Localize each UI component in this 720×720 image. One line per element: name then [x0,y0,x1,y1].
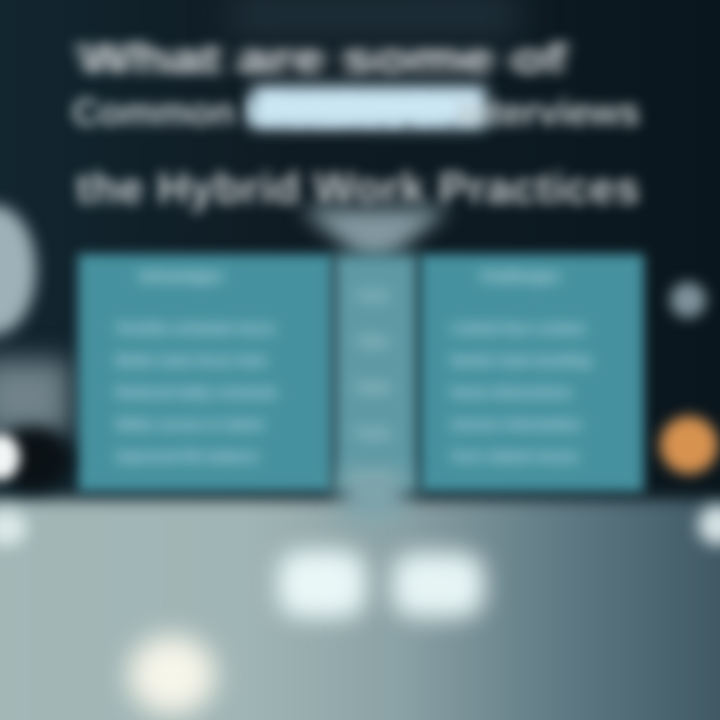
center column labels: Space [352,471,393,487]
background: dark upper wall [0,0,720,510]
light spot left edge [0,510,27,546]
floor light blob 1 [278,550,366,618]
left column text: Wider access to talent [116,416,264,432]
subtitle line: the Hybrid Work Practices [76,164,640,213]
top glow streak [230,0,520,40]
funnel shape [300,208,450,258]
icon: small grey dot right [670,282,706,318]
right column text: Limited face contact [450,320,585,336]
icon: orange circle [660,416,718,474]
right column text: Tech related issues [450,448,579,464]
left grey wall patch [0,360,70,435]
left column text: Reduced daily commute [116,384,277,400]
left column text: Better team focus time [116,352,267,368]
background: light floor [0,499,720,720]
center column labels: Time [356,333,389,349]
floor light blob 2 [392,552,484,618]
left column heading: Advantages [138,268,223,285]
icon: left round gauge [0,205,36,335]
icon: dark blob left [0,428,70,490]
light spot right edge [698,505,720,545]
right column text: Harder team bonding [450,352,591,368]
left column text [111,317,280,469]
left column text: Flexible schedule hours [116,320,276,336]
right column text [446,318,596,468]
center column labels: Cost [357,287,388,303]
panel: left column [78,254,333,492]
right column text: Uneven information [450,416,581,432]
panel: right column [420,254,644,492]
center column lower glow [342,470,406,520]
title line 1: What are some of [78,34,566,83]
floor warm glow [128,635,216,715]
title highlight [252,86,486,128]
title line 2: Common Mistakes in Interviews [72,92,640,134]
center column labels: Tools [354,425,391,441]
center column labels: Team [355,379,390,395]
right column text: Home distractions [450,384,572,400]
panel: center column [334,254,418,492]
left column text: Improved life balance [116,448,259,464]
funnel glow under subtitle [296,194,454,260]
center column labels [352,286,393,487]
icon: white blob left [0,434,20,480]
right column heading: Challenges [480,268,560,285]
